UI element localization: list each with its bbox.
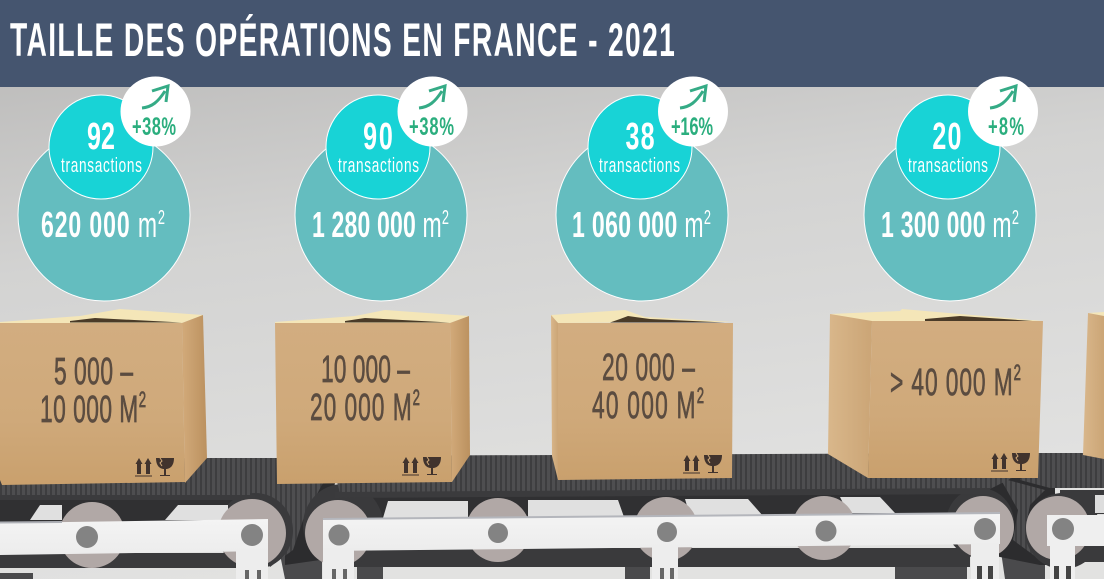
conveyor belts [0,453,1104,579]
bubble group 2 [295,76,468,301]
label [40,350,146,430]
rail 1 [0,519,268,579]
area value: 1 280 000 m [312,206,442,245]
transactions circle [49,95,153,199]
transactions count: 92 [87,115,115,157]
rail 2 [323,512,1000,579]
label: 2 [139,388,146,412]
growth badge [968,76,1038,146]
growth badge [398,76,468,146]
area value: 1 060 000 m [572,206,704,245]
support rails [0,512,1104,579]
label: 10 000 – [321,348,410,390]
transactions count: 38 [625,115,655,157]
header bar [0,0,1104,87]
area value: 2 [704,206,711,229]
area value: 2 [442,206,449,229]
area value: 2 [158,206,165,229]
transactions count: 20 [932,115,961,157]
icon: handling marks [402,457,441,476]
area value: 620 000 m [41,206,157,245]
label: 2 [413,386,420,410]
transactions circle [588,95,692,199]
area circle [864,129,1036,301]
label: 10 000 M [40,388,138,430]
icon: up arrow [142,86,168,108]
rollers [59,496,1090,568]
label: 5 000 – [54,350,133,392]
label: > 40 000 M [890,361,1013,403]
area circle [295,129,467,301]
belt 3 [985,453,1104,569]
growth value: +8% [988,114,1024,141]
area circle [18,129,190,301]
box 5: cropped edge box [1083,312,1104,459]
belt 1 [0,458,335,569]
lower supports [0,530,1045,579]
growth value: +38% [132,114,176,141]
transactions circle [326,95,430,199]
box 2: 10 000 – 20 000 m2 [275,310,470,484]
icon: up arrow [419,86,445,108]
belt 2 [303,453,1014,567]
label: 20 000 M [310,386,412,428]
growth badge [120,76,190,146]
transactions count: 90 [363,115,393,157]
label: 20 000 – [602,346,695,388]
box 3: 20 000 – 40 000 m2 [551,310,733,480]
bubble group 3 [556,76,728,301]
box 4: > 40 000 m2 [828,309,1043,478]
transactions circle [896,95,1000,199]
bubble group 4 [864,76,1038,301]
title: TAILLE DES OPÉRATIONS EN FRANCE - 2021 [10,14,675,67]
area value: 2 [1012,206,1019,229]
icon: handling marks [991,453,1030,472]
area value: 1 300 000 m [881,206,1012,245]
label [592,346,704,426]
label: 40 000 M [592,384,696,426]
label [310,348,420,428]
icon: up arrow [680,86,706,108]
transactions label: transactions [908,154,988,177]
transactions label: transactions [338,154,419,177]
growth badge [658,76,728,146]
icon: up arrow [990,86,1016,108]
transactions label: transactions [61,154,142,177]
box 1: 5 000 – 10 000 m2 [0,309,207,485]
icon: handling marks [135,458,174,476]
growth value: +38% [409,114,454,141]
bubble group 1 [18,76,190,301]
rail 3 [1047,515,1104,579]
growth value: +16% [671,114,713,141]
label: 2 [1014,361,1021,385]
label: 2 [697,384,704,408]
icon: handling marks [683,455,722,474]
transactions label: transactions [599,154,680,177]
area circle [556,129,728,301]
